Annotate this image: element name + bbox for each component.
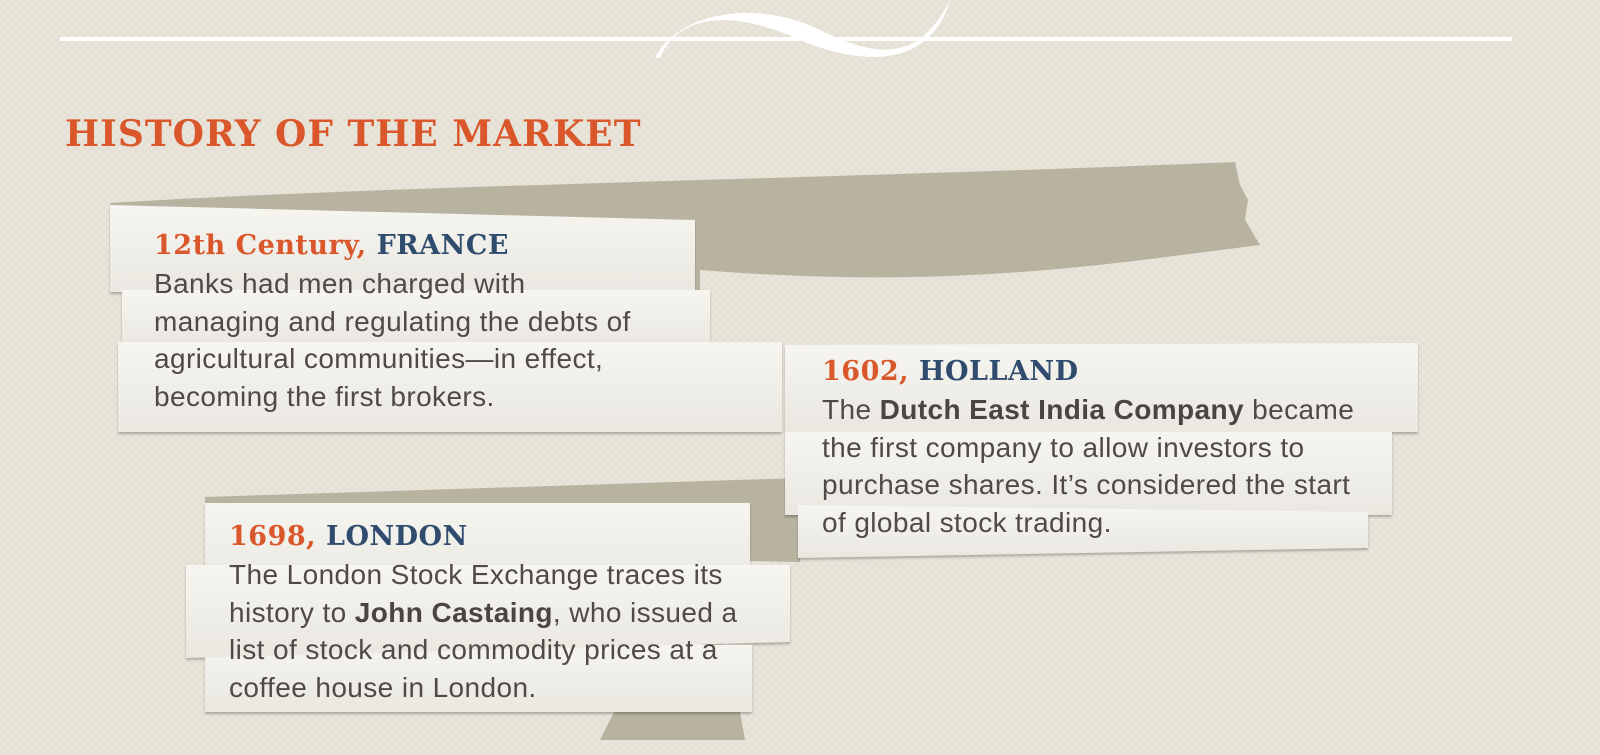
ribbon 1: [110, 162, 1260, 300]
divider with swash: [60, 0, 1512, 58]
card: Holland: purchase shares. It’s considered the start: [822, 469, 1350, 500]
card: France: managing and regulating the debts of: [154, 306, 631, 336]
card: France: 12th Century, FRANCE: [154, 230, 509, 261]
card: Holland: the first company to allow investors to: [822, 432, 1304, 462]
card: France: Banks had men charged with: [154, 268, 526, 299]
card: London: coffee house in London.: [229, 672, 537, 702]
card: France: agricultural communities—in effect,: [154, 343, 603, 374]
card: London: history to John Castaing, who issued a: [229, 596, 738, 628]
card: France: becoming the first brokers.: [154, 380, 495, 412]
card: London: [229, 521, 738, 702]
ribbon 2: [205, 478, 800, 740]
card: Holland: [822, 356, 1354, 538]
card strips: [110, 205, 1418, 712]
card: Holland: The Dutch East India Company became: [822, 394, 1354, 425]
card: Holland: 1602, HOLLAND: [822, 356, 1078, 387]
card: London: list of stock and commodity prices at a: [229, 634, 718, 665]
card: Holland: of global stock trading.: [822, 506, 1112, 538]
title: HISTORY OF THE MARKET: [65, 113, 642, 155]
card: London: The London Stock Exchange traces its: [229, 559, 723, 590]
card: France: [154, 230, 631, 412]
card: London: 1698, LONDON: [229, 521, 468, 552]
